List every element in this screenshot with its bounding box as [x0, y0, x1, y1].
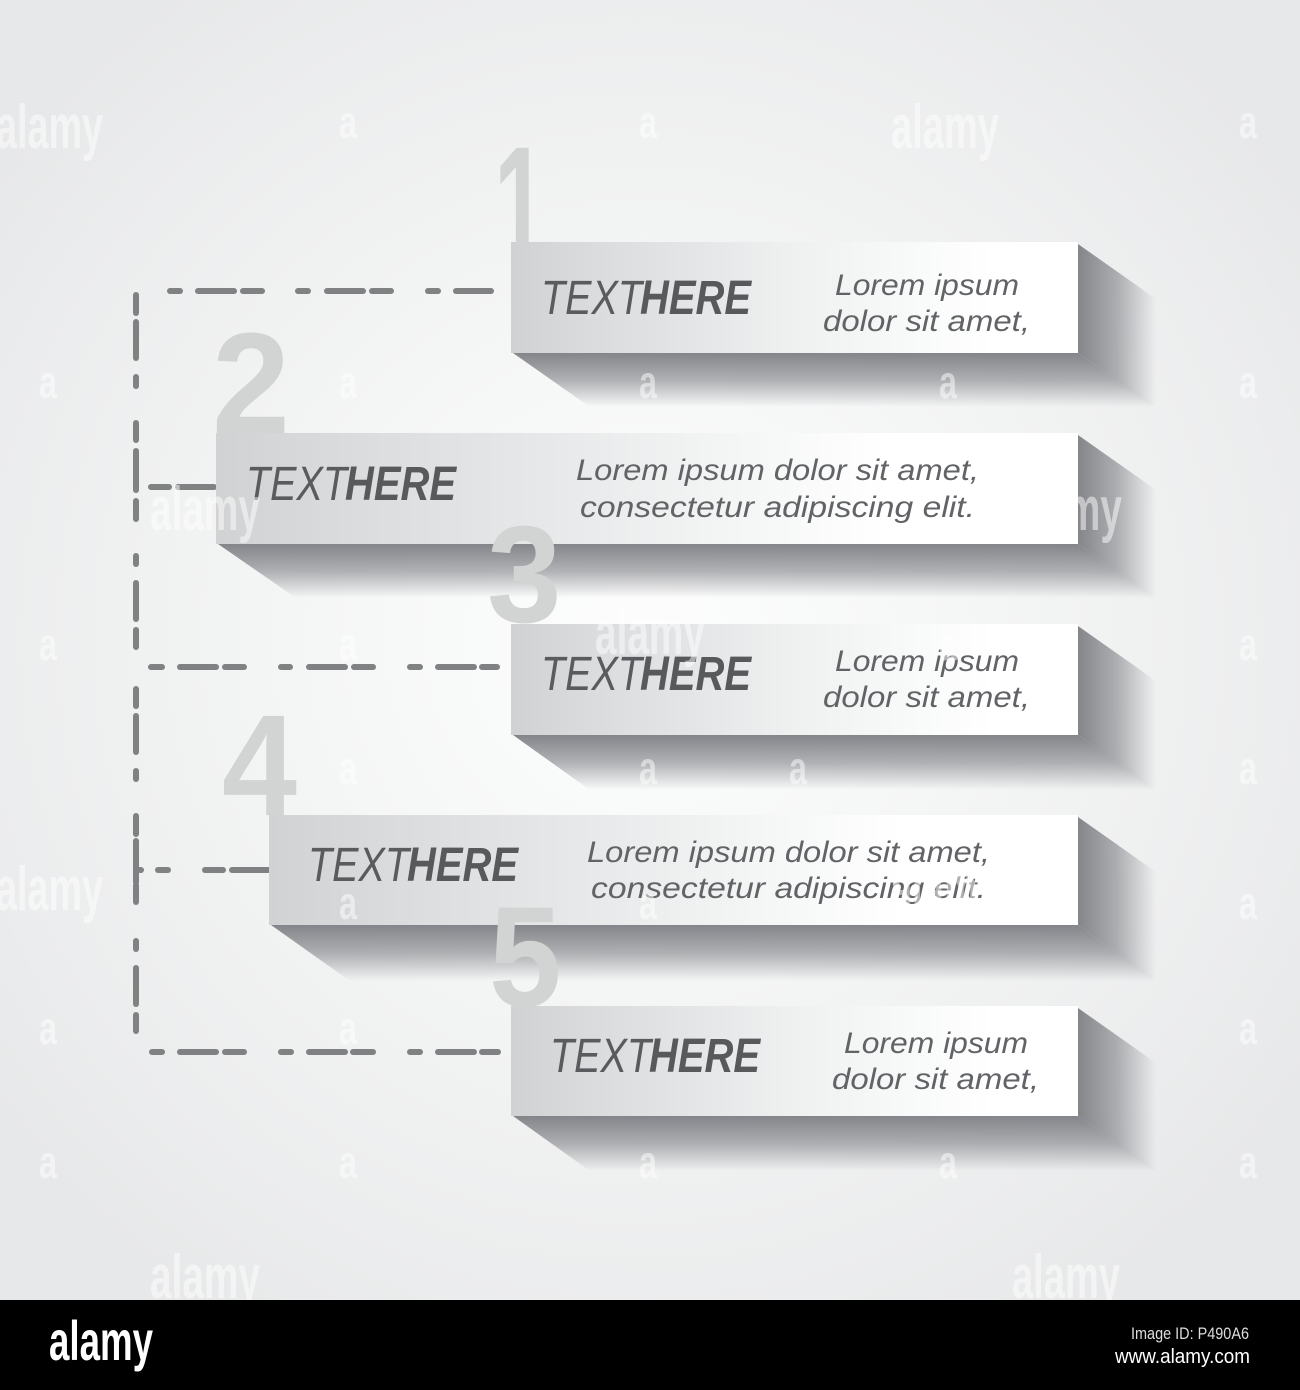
- shadow: bar 1: [513, 244, 1156, 407]
- text block: bar 4: [587, 836, 990, 905]
- text block: bar 2: Lorem ipsum dolor sit amet,: [576, 454, 979, 487]
- heading: bar 1: [541, 272, 753, 325]
- panel: bar 1: [511, 242, 1078, 353]
- text block: bar 1: Lorem ipsum: [835, 269, 1019, 302]
- panel: bar 4: [269, 815, 1078, 925]
- step 3: [487, 498, 1078, 735]
- watermarks: a: [789, 742, 807, 794]
- watermarks: a: [639, 1136, 657, 1188]
- text block: bar 1: dolor sit amet,: [823, 305, 1030, 338]
- watermarks: alamy: [1012, 475, 1122, 544]
- footer image id: Image ID: P490A6: [1131, 1324, 1249, 1343]
- watermarks: a: [1239, 1002, 1257, 1054]
- heading: bar 2: HERE: [345, 458, 458, 511]
- watermarks: a: [339, 618, 357, 670]
- watermarks: a: [1239, 1136, 1257, 1188]
- watermarks: a: [39, 356, 57, 408]
- text block: bar 4: Lorem ipsum dolor sit amet,: [587, 836, 990, 869]
- number 1: 1: [494, 113, 546, 298]
- panel: bar 5: [511, 1006, 1078, 1116]
- watermarks: alamy: [0, 93, 103, 162]
- watermarks: a: [1239, 618, 1257, 670]
- text block: bar 1: [823, 269, 1030, 338]
- heading: bar 4: HERE: [407, 839, 520, 892]
- watermarks: alamy: [150, 475, 260, 544]
- heading: bar 3: [541, 648, 753, 701]
- text block: bar 2: consectetur adipiscing elit.: [580, 491, 975, 524]
- watermarks: alamy: [891, 855, 999, 924]
- footer bar: [0, 1300, 1300, 1390]
- panel: bar 3: [511, 624, 1078, 735]
- text block: bar 3: Lorem ipsum: [835, 645, 1019, 678]
- watermarks: a: [339, 742, 357, 794]
- watermarks: a: [1239, 96, 1257, 148]
- step 5: [489, 878, 1078, 1116]
- connector: dashed lines: [136, 291, 498, 1052]
- number 4: 4: [222, 685, 297, 846]
- step 1: [494, 113, 1078, 353]
- number 2: 2: [212, 303, 290, 464]
- heading: bar 4: TEXT: [308, 839, 412, 892]
- heading: bar 1: HERE: [640, 272, 753, 325]
- heading: bar 4: [308, 839, 520, 892]
- text block: bar 5: dolor sit amet,: [832, 1063, 1039, 1096]
- shadow: bar 4: [271, 817, 1156, 981]
- heading: bar 5: TEXT: [550, 1030, 654, 1083]
- watermarks: a: [939, 356, 957, 408]
- shadow: bar 5: [513, 1008, 1156, 1171]
- watermarks: alamy: [891, 93, 999, 162]
- heading: bar 5: [550, 1030, 762, 1083]
- watermarks: a: [339, 96, 357, 148]
- number 3: 3: [487, 498, 562, 652]
- watermarks: a: [639, 877, 657, 929]
- watermarks: a: [639, 96, 657, 148]
- watermarks: alamy: [150, 1243, 260, 1312]
- text block: bar 5: [832, 1027, 1039, 1096]
- footer url: www.alamy.com: [1114, 1346, 1250, 1368]
- watermarks: a: [39, 1136, 57, 1188]
- number 5: 5: [489, 878, 562, 1037]
- step 4: [222, 685, 1078, 925]
- text block: bar 2: [576, 454, 979, 524]
- watermarks: alamy: [595, 599, 705, 668]
- watermarks: a: [639, 742, 657, 794]
- watermarks: a: [339, 356, 357, 408]
- text block: bar 3: [823, 645, 1030, 714]
- watermarks: alamy: [0, 855, 103, 924]
- watermarks: a: [939, 618, 957, 670]
- watermarks: a: [339, 1136, 357, 1188]
- watermarks: a: [39, 618, 57, 670]
- step 2: [212, 303, 1078, 544]
- watermarks: alamy: [1012, 1243, 1120, 1312]
- watermarks: a: [1239, 356, 1257, 408]
- watermarks: a: [39, 1002, 57, 1054]
- footer logo: alamy: [49, 1309, 153, 1372]
- heading: bar 3: TEXT: [541, 648, 645, 701]
- text block: bar 4: consectetur adipiscing elit.: [591, 872, 986, 905]
- watermarks: a: [1239, 877, 1257, 929]
- text block: bar 5: Lorem ipsum: [844, 1027, 1028, 1060]
- text block: bar 3: dolor sit amet,: [823, 681, 1030, 714]
- shadow: bar 3: [513, 626, 1156, 790]
- heading: bar 1: TEXT: [541, 272, 645, 325]
- watermarks: a: [1239, 742, 1257, 794]
- watermarks: a: [639, 356, 657, 408]
- watermarks: a: [339, 877, 357, 929]
- heading: bar 3: HERE: [640, 648, 753, 701]
- panel: bar 2: [216, 433, 1078, 544]
- watermarks: a: [339, 1002, 357, 1054]
- watermarks: a: [939, 1136, 957, 1188]
- heading: bar 5: HERE: [649, 1030, 762, 1083]
- heading: bar 2: TEXT: [246, 458, 350, 511]
- heading: bar 2: [246, 458, 458, 511]
- shadow: bar 2: [218, 435, 1156, 598]
